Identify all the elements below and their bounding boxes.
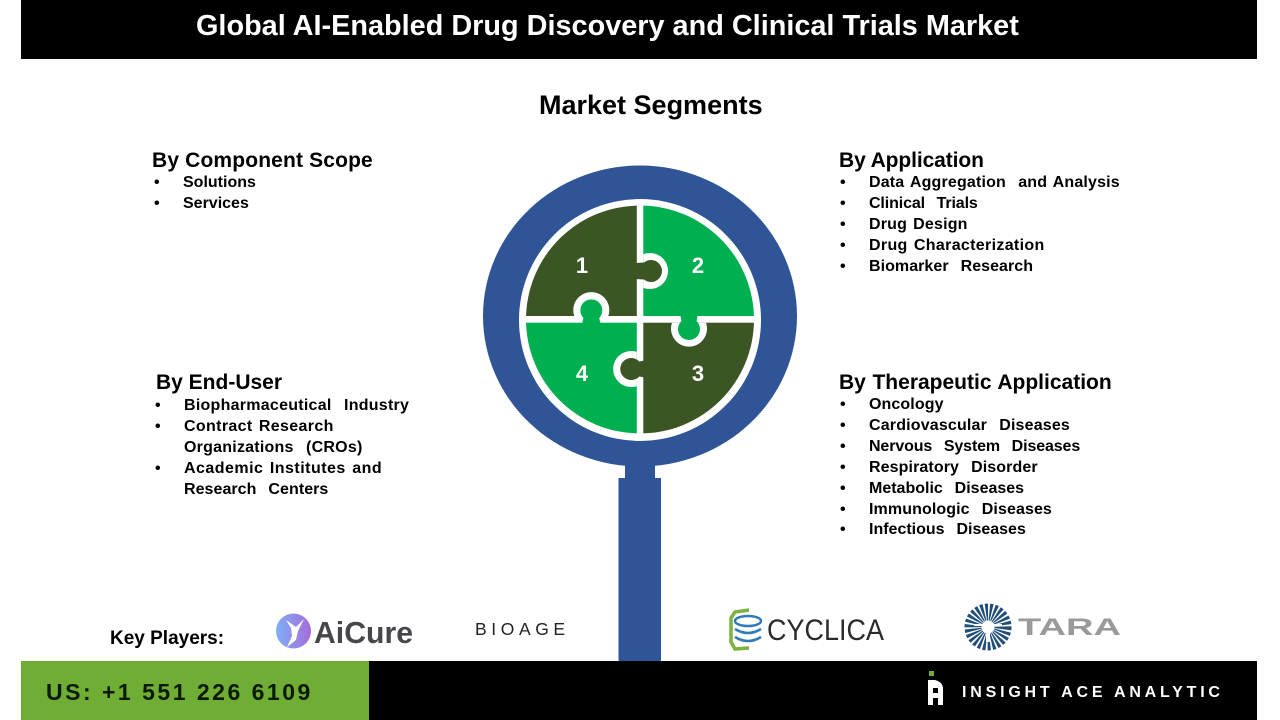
logo: Tara (964, 604, 1121, 650)
panel: by end-user: • (155, 418, 161, 434)
logo: Cyclica (729, 608, 884, 651)
panel: by therapeutic application: • (840, 480, 846, 497)
piece 4 (520, 323, 637, 440)
panel: by therapeutic application: • (840, 459, 846, 476)
heading: by component scope: By Component Scope (152, 149, 373, 172)
list: component scope: Solutions Services (183, 174, 256, 212)
numbers: 3 (692, 361, 704, 386)
heading: by therapeutic application: By Therapeutic Application (839, 371, 1112, 394)
tab 3 (620, 358, 645, 380)
title bar (21, 0, 1257, 59)
numbers: 4 (576, 361, 589, 386)
panel: by therapeutic application (839, 371, 1112, 538)
panel: by therapeutic application: • (840, 501, 846, 518)
panel: by component scope: • (154, 195, 160, 212)
piece 1 (520, 200, 637, 316)
numbers: 1 (576, 253, 588, 278)
heading: by end-user: By End-User (156, 371, 282, 394)
logo: Bioage: BIOAGE (475, 619, 570, 639)
footer (21, 661, 1257, 720)
logo: Tara: TARA (1018, 614, 1121, 641)
panel: by application: • (840, 174, 846, 191)
magnifier ring (483, 166, 797, 466)
numbers (576, 253, 704, 386)
list: end-user: Biopharmaceutical Industry Contract Research Organizations (CROs) Academic Institutes and Research Centers (184, 396, 409, 498)
panel: by therapeutic application: • (840, 396, 846, 413)
key players label: Key Players: (110, 628, 224, 649)
panel: by component scope (152, 149, 373, 212)
socket outlines (573, 253, 707, 387)
brand name: INSIGHT ACE ANALYTIC (962, 684, 1224, 701)
numbers: 2 (692, 253, 704, 278)
logo: AiCure: AiCure (314, 615, 413, 650)
puzzle (520, 200, 760, 440)
list: therapeutic application: Oncology Cardiovascular Diseases Nervous System Diseases Respiratory Disorder Metabolic Diseases Immunologic Diseases Infectious Diseases (869, 396, 1080, 538)
panel: by end-user: • (155, 460, 161, 476)
tab 2 (678, 314, 700, 340)
heading: by application: By Application (839, 149, 984, 172)
panel: by therapeutic application: • (840, 438, 846, 455)
heading: market segments: Market Segments (539, 90, 763, 120)
phone panel (21, 661, 369, 720)
piece 2 (643, 200, 760, 316)
magnifier handle (618, 460, 661, 662)
tab 4 (580, 299, 602, 324)
panel: by therapeutic application: • (840, 417, 846, 434)
panel: by therapeutic application: • (840, 521, 846, 538)
logo: Insight Ace icon (928, 671, 943, 705)
panel: by application: • (840, 237, 846, 254)
panel: by application: • (840, 216, 846, 233)
piece 3 (643, 323, 760, 440)
list: application: Data Aggregation and Analysis Clinical Trials Drug Design Drug Characterization Biomarker Research (869, 174, 1120, 275)
phone number: US: +1 551 226 6109 (46, 679, 313, 705)
logo: AiCure (276, 614, 413, 650)
panel: by end-user: • (155, 396, 161, 414)
panel: by component scope: • (154, 174, 160, 191)
panel: by application: • (840, 195, 846, 212)
panel: by application (839, 149, 1120, 275)
magnifying glass with puzzle (483, 166, 797, 661)
panel: by application: • (840, 258, 846, 275)
panel: by end-user (155, 371, 409, 498)
tab 1 (635, 260, 662, 282)
title: Global AI-Enabled Drug Discovery and Clinical Trials Market (196, 10, 1019, 42)
